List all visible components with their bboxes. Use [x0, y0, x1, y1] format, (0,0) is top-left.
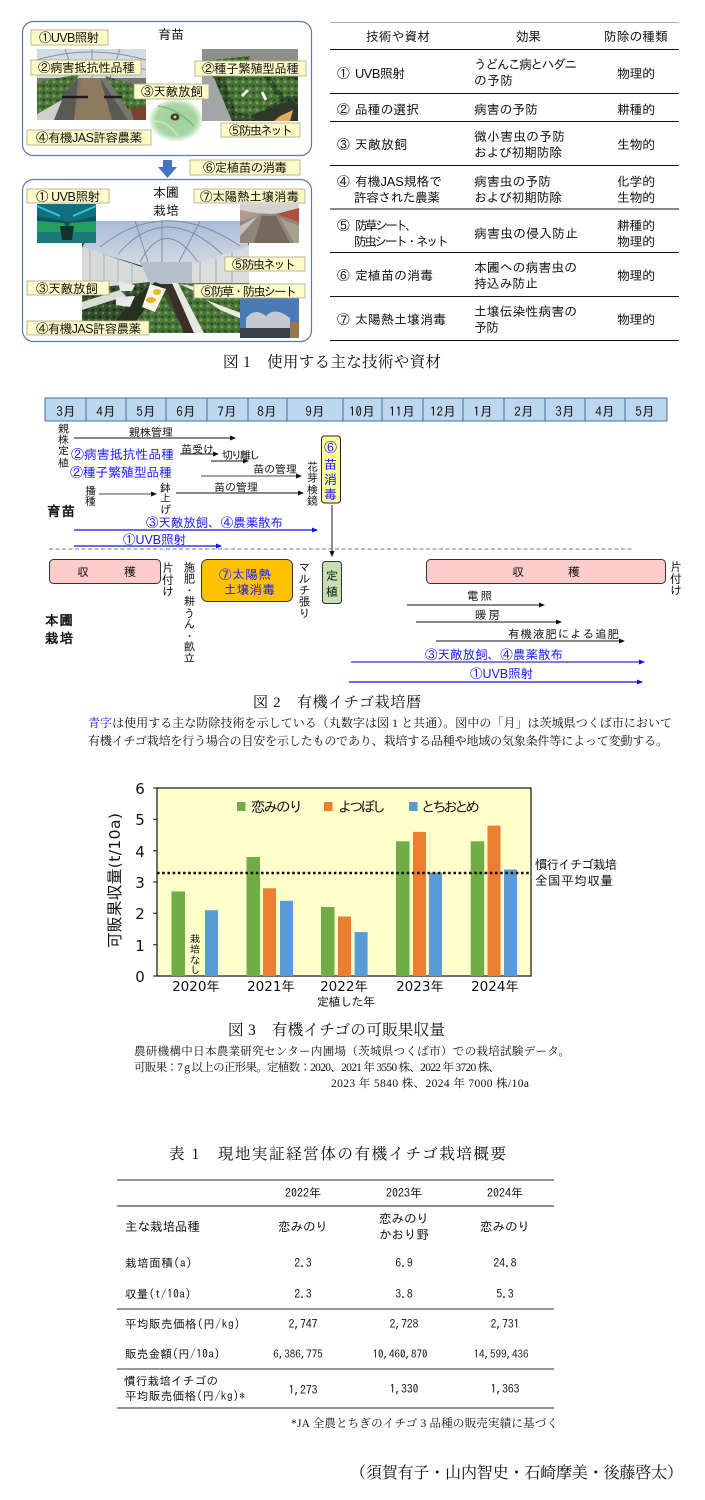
table: farm overview: 平均販売価格(円/kg)* — [125, 1390, 245, 1402]
photo: main greenhouse — [82, 221, 249, 333]
legend — [237, 799, 480, 814]
label: ②種子繁殖型品種: ②種子繁殖型品種 — [202, 62, 299, 76]
y axis labels: 0 — [135, 968, 145, 986]
label: ⑤防草・防虫シート: ⑤防草・防虫シート — [201, 285, 297, 299]
note: figure 3 — [134, 1044, 570, 1090]
schedule: month bar: 9月 — [305, 405, 325, 418]
average line label — [535, 858, 617, 887]
schedule: month bar: 12月 — [430, 405, 456, 418]
bar chart: marketable yield — [106, 780, 617, 1008]
schedule: month bar: 1月 — [473, 405, 493, 418]
schedule: nursery stage tasks: ②病害抵抗性品種 — [71, 447, 174, 462]
panel: main field (本圃栽培) — [22, 180, 312, 342]
table: techniques and materials: 太陽熱土壌消毒 — [355, 312, 446, 327]
arrow: nursery to main field — [158, 160, 177, 178]
y axis labels: 1 — [135, 937, 145, 955]
table: farm overview: 5.3 — [496, 1289, 514, 1300]
legend: とちおとめ — [421, 799, 480, 814]
box: ⑥苗消毒: ⑥ — [324, 441, 337, 454]
box: harvest (left) — [50, 560, 160, 584]
heading: 本圃栽培: 栽培 — [153, 203, 179, 218]
table: techniques and materials: 物理的 — [617, 312, 655, 327]
x axis labels: 2022年 — [320, 979, 368, 995]
table: farm overview: 6.9 — [395, 1258, 413, 1269]
table: techniques and materials: 化学的 — [617, 174, 655, 189]
table: farm overview: 恋みのり — [480, 1220, 530, 1233]
schedule: nursery stage tasks: 花芽検鏡 — [306, 461, 318, 507]
table: farm overview: 2023年 — [386, 1186, 422, 1199]
note: table 1: *JA 全農とちぎのイチゴ 3 品種の販売実績に基づく — [291, 1416, 558, 1430]
note: figure 3: 農研機構中日本農業研究センター内圃場（茨城県つくば市）での栽培試験データ。 — [134, 1044, 570, 1058]
note: figure 2 — [88, 715, 672, 748]
label: ①UVB照射: ①UVB照射 — [39, 31, 100, 45]
table: farm overview: 1,363 — [491, 1384, 520, 1395]
photo: ladybug on leaf — [148, 98, 204, 142]
table: farm overview: 2024年 — [487, 1186, 523, 1199]
caption: figure 2: 図 2 有機イチゴ栽培暦 — [253, 694, 421, 711]
box: ⑥苗消毒: 毒 — [324, 488, 337, 501]
label: ⑤防虫ネット: ⑤防虫ネット — [229, 124, 293, 138]
schedule: nursery stage tasks — [47, 423, 318, 547]
table: techniques and materials: ④ — [337, 174, 350, 189]
annotation: 栽培なし: 栽培なし — [190, 933, 200, 975]
table: farm overview: 3.8 — [395, 1289, 413, 1300]
table: techniques and materials: 防虫シート・ネット — [354, 234, 449, 249]
schedule: month bar: 6月 — [176, 405, 196, 418]
schedule: nursery stage tasks: 鉢上げ — [159, 481, 171, 514]
table: techniques and materials: 防草シート、 — [355, 218, 418, 233]
table: techniques and materials: ② — [337, 102, 350, 117]
box: harvest (left): 穫 — [124, 565, 136, 579]
table: techniques and materials: 病害虫の侵入防止 — [474, 226, 578, 241]
schedule: month bar — [45, 398, 667, 421]
label: ① UVB照射: ① UVB照射 — [36, 190, 100, 204]
schedule: month bar: 2月 — [514, 405, 534, 418]
table: techniques and materials: ⑦ — [337, 312, 350, 327]
schedule: month bar: 7月 — [217, 405, 237, 418]
table: techniques and materials: 品種の選択 — [355, 102, 419, 117]
schedule: nursery stage tasks: 苗受け — [181, 444, 214, 456]
photo: nursery greenhouse — [37, 49, 146, 120]
table: farm overview: 慣行栽培イチゴの — [124, 1375, 218, 1387]
schedule: month bar: 4月 — [595, 405, 615, 418]
table: techniques and materials: 生物的 — [617, 190, 655, 205]
box: ⑥苗消毒: 苗 — [324, 458, 337, 471]
table: techniques and materials: ⑤ — [337, 218, 350, 233]
note: figure 3: 可販果：7 g 以上の正形果。定植数：2020、2021 年 3550 株、2022 年 3720 株、 — [134, 1060, 500, 1074]
box: 定植 — [322, 562, 342, 604]
schedule: month bar: 3月 — [555, 405, 575, 418]
y axis labels: 2 — [135, 905, 145, 923]
table: farm overview: 販売金額(円/10a) — [125, 1348, 220, 1360]
schedule: main field stage tasks: ①UVB照射 — [470, 667, 534, 681]
table: techniques and materials: 病害虫の予防 — [474, 174, 551, 189]
table: farm overview: 1,330 — [390, 1384, 419, 1395]
bars: とちおとめ — [205, 870, 517, 976]
box: harvest (right) — [426, 560, 666, 584]
schedule: month bar: 8月 — [257, 405, 277, 418]
table: farm overview: 栽培面積(a) — [125, 1257, 192, 1269]
table: techniques and materials: 耕種的 — [617, 102, 655, 117]
table: farm overview: 10,460,870 — [372, 1349, 428, 1360]
table: techniques and materials: 生物的 — [617, 137, 655, 152]
average line label: 慣行イチゴ栽培 — [535, 858, 617, 871]
table: techniques and materials: ① — [337, 66, 350, 81]
schedule: nursery stage tasks: 切り離し — [222, 450, 260, 462]
table: techniques and materials: および初期防除 — [474, 190, 562, 205]
box: ⑦太陽熱土壌消毒: ⑦太陽熱 — [219, 568, 272, 582]
x axis labels: 2020年 — [172, 979, 220, 995]
table: farm overview: 14,599,436 — [474, 1349, 528, 1360]
table: techniques and materials: 微小害虫の予防 — [474, 129, 565, 144]
schedule: nursery stage tasks: ②種子繁殖型品種 — [70, 465, 172, 480]
table: farm overview: 24.8 — [494, 1258, 517, 1269]
x axis labels: 2021年 — [247, 979, 295, 995]
y axis labels — [135, 780, 145, 986]
caption: figure 3: 図 3 有機イチゴの可販果収量 — [228, 1021, 445, 1039]
table: techniques and materials: 許容された農薬 — [354, 190, 440, 205]
table: techniques and materials: 持込み防止 — [474, 276, 538, 291]
y axis labels: 6 — [135, 780, 145, 798]
box: ⑥苗消毒 — [322, 436, 340, 503]
heading: 本圃栽培: 本圃 — [45, 613, 73, 628]
schedule: main field stage tasks: マルチ張り — [298, 561, 310, 618]
table: techniques and materials: の予防 — [474, 73, 513, 88]
schedule: month bar: 3月 — [56, 405, 76, 418]
table: farm overview: かおり野 — [379, 1228, 429, 1241]
schedule: nursery stage tasks: 親株定植 — [57, 423, 69, 468]
table: farm overview: 2,731 — [491, 1319, 519, 1330]
label: ④有機JAS許容農薬: ④有機JAS許容農薬 — [36, 131, 142, 145]
bars: よつぼし — [263, 826, 500, 976]
y axis labels: 4 — [135, 843, 145, 861]
schedule: main field stage tasks: 暖房 — [475, 609, 500, 622]
panel: nursery (育苗) — [22, 22, 312, 156]
table: techniques and materials: 土壌伝染性病害の — [474, 304, 577, 319]
table: techniques and materials: 物理的 — [617, 66, 655, 81]
table: techniques and materials: 技術や資材 — [366, 29, 430, 44]
label: ④有機JAS許容農薬: ④有機JAS許容農薬 — [36, 322, 141, 336]
schedule: month bar: 11月 — [389, 405, 415, 418]
schedule: main field stage tasks: 施肥・耕うん・畝立 — [183, 561, 195, 664]
schedule: nursery stage tasks: 苗の管理 — [253, 464, 297, 476]
y axis title: 可販果収量(t/10a) — [106, 813, 124, 948]
box: ⑦太陽熱土壌消毒: 土壌消毒 — [224, 583, 275, 597]
schedule: main field stage tasks — [45, 560, 683, 682]
label: ③天敵放飼: ③天敵放飼 — [36, 282, 98, 296]
box: ⑥苗消毒: 消 — [324, 473, 337, 486]
bars: 恋みのり — [172, 841, 484, 976]
table: techniques and materials: うどんこ病とハダニ — [474, 57, 577, 72]
photo: solarized soil bed — [240, 204, 299, 243]
heading: 本圃栽培: 栽培 — [45, 631, 74, 646]
box: harvest (left): 収 — [77, 565, 89, 579]
schedule: nursery stage tasks: ③天敵放飼、④農薬散布 — [146, 516, 283, 530]
box: harvest (right): 穫 — [568, 565, 580, 579]
arrow: seedling disinfection to planting — [331, 505, 333, 556]
schedule: nursery stage tasks: 親株管理 — [129, 427, 173, 439]
heading: 育苗: 育苗 — [158, 27, 184, 42]
note: figure 3: 2023 年 5840 株、2024 年 7000 株/10a — [331, 1076, 529, 1090]
table: farm overview: 2.3 — [294, 1258, 312, 1269]
label: ⑦太陽熱土壌消毒: ⑦太陽熱土壌消毒 — [200, 190, 299, 204]
table: farm overview: 主な栽培品種 — [125, 1220, 200, 1233]
schedule: main field stage tasks: 片付け — [161, 561, 175, 597]
caption: table 1: 表 1 現地実証経営体の有機イチゴ栽培概要 — [169, 1144, 506, 1163]
table: farm overview: 6,386,775 — [273, 1349, 323, 1360]
caption: figure 1: 図 1 使用する主な技術や資材 — [223, 353, 441, 371]
legend: 恋みのり — [251, 799, 303, 814]
x axis title: 定植した年 — [317, 995, 375, 1008]
label: ③天敵放飼: ③天敵放飼 — [141, 85, 203, 99]
table: farm overview: 恋みのり — [379, 1212, 429, 1225]
note: figure 2: 青字は使用する主な防除技術を示している（丸数字は図 1 と共通）。図中の「月」は茨城県つくば市において — [88, 715, 672, 730]
schedule: month bar: 4月 — [96, 405, 116, 418]
table: farm overview: 1,273 — [289, 1385, 318, 1396]
table: techniques and materials: ⑥ — [337, 268, 350, 283]
y axis labels: 5 — [135, 811, 145, 829]
heading: 本圃栽培: 本圃 — [153, 185, 179, 200]
table: farm overview — [117, 1180, 554, 1408]
table: techniques and materials: 耕種的 — [617, 218, 655, 233]
table: farm overview: 2022年 — [285, 1186, 321, 1199]
schedule: nursery stage tasks: 苗の管理 — [214, 482, 258, 494]
table: farm overview: 2.3 — [294, 1289, 312, 1300]
table: techniques and materials: 本圃への病害虫の — [474, 260, 577, 275]
table: farm overview: 収量(t/10a) — [125, 1288, 191, 1300]
note: figure 2: 有機イチゴ栽培を行う場合の目安を示したものであり、栽培する品種や地域の気象条件等によって変動する。 — [88, 733, 668, 748]
schedule: month bar: 5月 — [136, 405, 156, 418]
table: techniques and materials: 病害の予防 — [474, 102, 538, 117]
x axis labels — [172, 979, 519, 995]
table: techniques and materials: 有機JAS規格で — [355, 174, 442, 189]
authors: （須賀有子・山内智史・石崎摩美・後藤啓太） — [350, 1464, 683, 1482]
heading: 本圃栽培 — [45, 613, 74, 646]
label: ②病害抵抗性品種: ②病害抵抗性品種 — [38, 61, 135, 75]
box: ⑦太陽熱土壌消毒 — [202, 560, 292, 602]
photo: covered greenhouses exterior — [240, 298, 299, 338]
schedule: nursery stage tasks: 播種 — [84, 484, 96, 506]
photo: seedlings on bench — [202, 49, 298, 121]
table: techniques and materials: 天敵放飼 — [355, 137, 407, 152]
x axis labels: 2024年 — [471, 979, 519, 995]
table: techniques and materials: 定植苗の消毒 — [355, 268, 433, 283]
average line label: 全国平均収量 — [535, 874, 613, 887]
schedule: main field stage tasks: 有機液肥による追肥 — [508, 628, 619, 641]
y axis labels: 3 — [135, 874, 145, 892]
table: techniques and materials: ③ — [337, 137, 350, 152]
label: ⑤防虫ネット: ⑤防虫ネット — [232, 258, 296, 272]
average line — [157, 872, 531, 874]
table: techniques and materials: 防除の種類 — [604, 29, 668, 44]
label: ⑥定植苗の消毒: ⑥定植苗の消毒 — [203, 161, 287, 175]
table: farm overview: 恋みのり — [278, 1220, 328, 1233]
table: farm overview: 2,747 — [289, 1319, 318, 1330]
x axis labels: 2023年 — [396, 979, 444, 995]
schedule: nursery stage tasks: 育苗 — [47, 504, 75, 519]
box: harvest (right): 収 — [512, 565, 524, 579]
heading: 本圃栽培 — [153, 185, 179, 218]
schedule: month bar: 5月 — [635, 405, 655, 418]
table: techniques and materials: 物理的 — [617, 268, 655, 283]
schedule: main field stage tasks: ③天敵放飼、④農薬散布 — [425, 648, 563, 662]
table: techniques and materials: 予防 — [474, 320, 499, 335]
table: techniques and materials: 効果 — [516, 29, 541, 44]
schedule: month bar: 10月 — [349, 405, 375, 418]
table: techniques and materials — [330, 22, 679, 340]
box: 定植: 植 — [326, 585, 338, 599]
photo: UVB lamps at night — [37, 204, 96, 243]
table: farm overview: 平均販売価格(円/kg) — [125, 1318, 240, 1330]
table: techniques and materials: および初期防除 — [474, 145, 562, 160]
table: farm overview: 2,728 — [390, 1319, 419, 1330]
legend: よつぼし — [338, 799, 386, 814]
table: techniques and materials: 物理的 — [617, 234, 655, 249]
box: 定植: 定 — [326, 569, 338, 583]
table: techniques and materials: UVB照射 — [355, 66, 405, 81]
schedule: main field stage tasks: 片付け — [669, 560, 683, 596]
schedule: nursery stage tasks: ①UVB照射 — [123, 533, 186, 547]
schedule: main field stage tasks: 電照 — [467, 591, 492, 603]
